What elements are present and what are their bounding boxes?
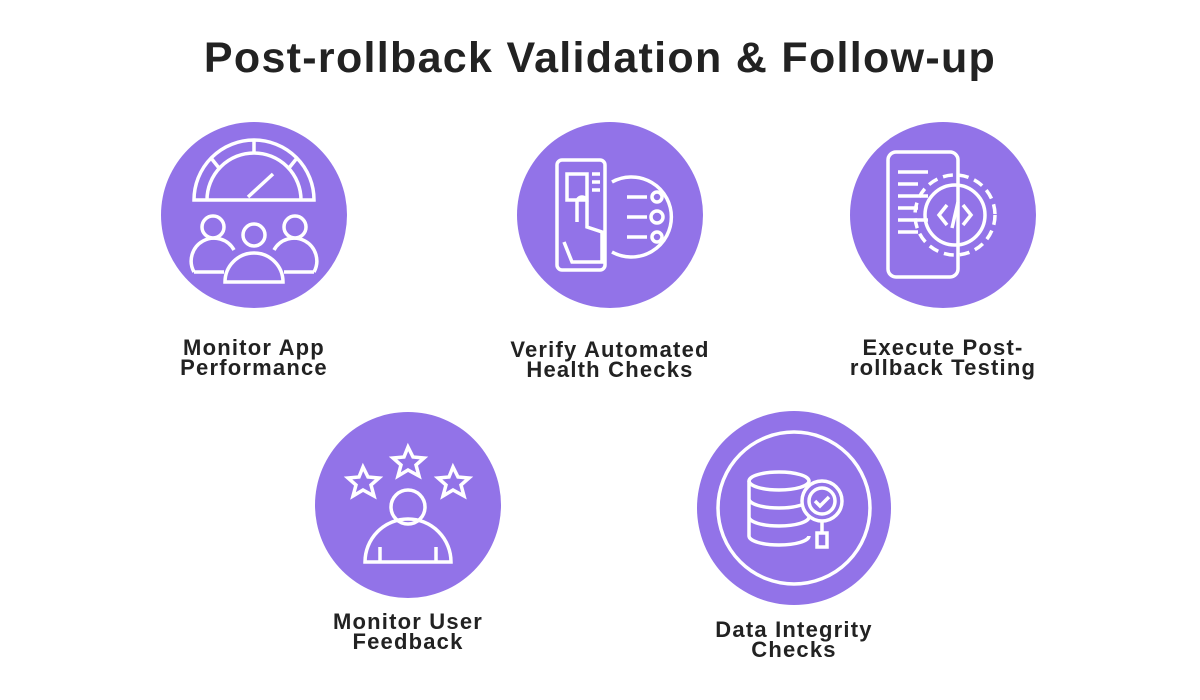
icon: data integrity circle	[697, 411, 891, 605]
label: execute post-rollback testing: Execute Post-	[862, 335, 1024, 360]
label: monitor user feedback: Monitor User	[333, 609, 483, 634]
icon: performance circle	[161, 122, 347, 308]
label: monitor user feedback	[333, 609, 483, 654]
label: data integrity checks: Checks	[751, 637, 837, 662]
label: execute post-rollback testing	[850, 335, 1036, 380]
label: monitor app performance: Monitor App	[183, 335, 325, 360]
icon: user feedback circle	[315, 412, 501, 598]
label: verify automated health checks: Verify Automated	[510, 337, 710, 362]
label: monitor user feedback: Feedback	[352, 629, 464, 654]
label: verify automated health checks	[510, 337, 710, 382]
icon: testing circle	[850, 122, 1036, 308]
label: data integrity checks	[715, 617, 873, 662]
label: monitor app performance	[180, 335, 328, 380]
label: data integrity checks: Data Integrity	[715, 617, 873, 642]
icon: health checks circle	[517, 122, 703, 308]
label: monitor app performance: Performance	[180, 355, 328, 380]
label: execute post-rollback testing: rollback Testing	[850, 355, 1036, 380]
title: Post-rollback Validation & Follow-up	[204, 34, 996, 82]
label: verify automated health checks: Health Checks	[526, 357, 694, 382]
